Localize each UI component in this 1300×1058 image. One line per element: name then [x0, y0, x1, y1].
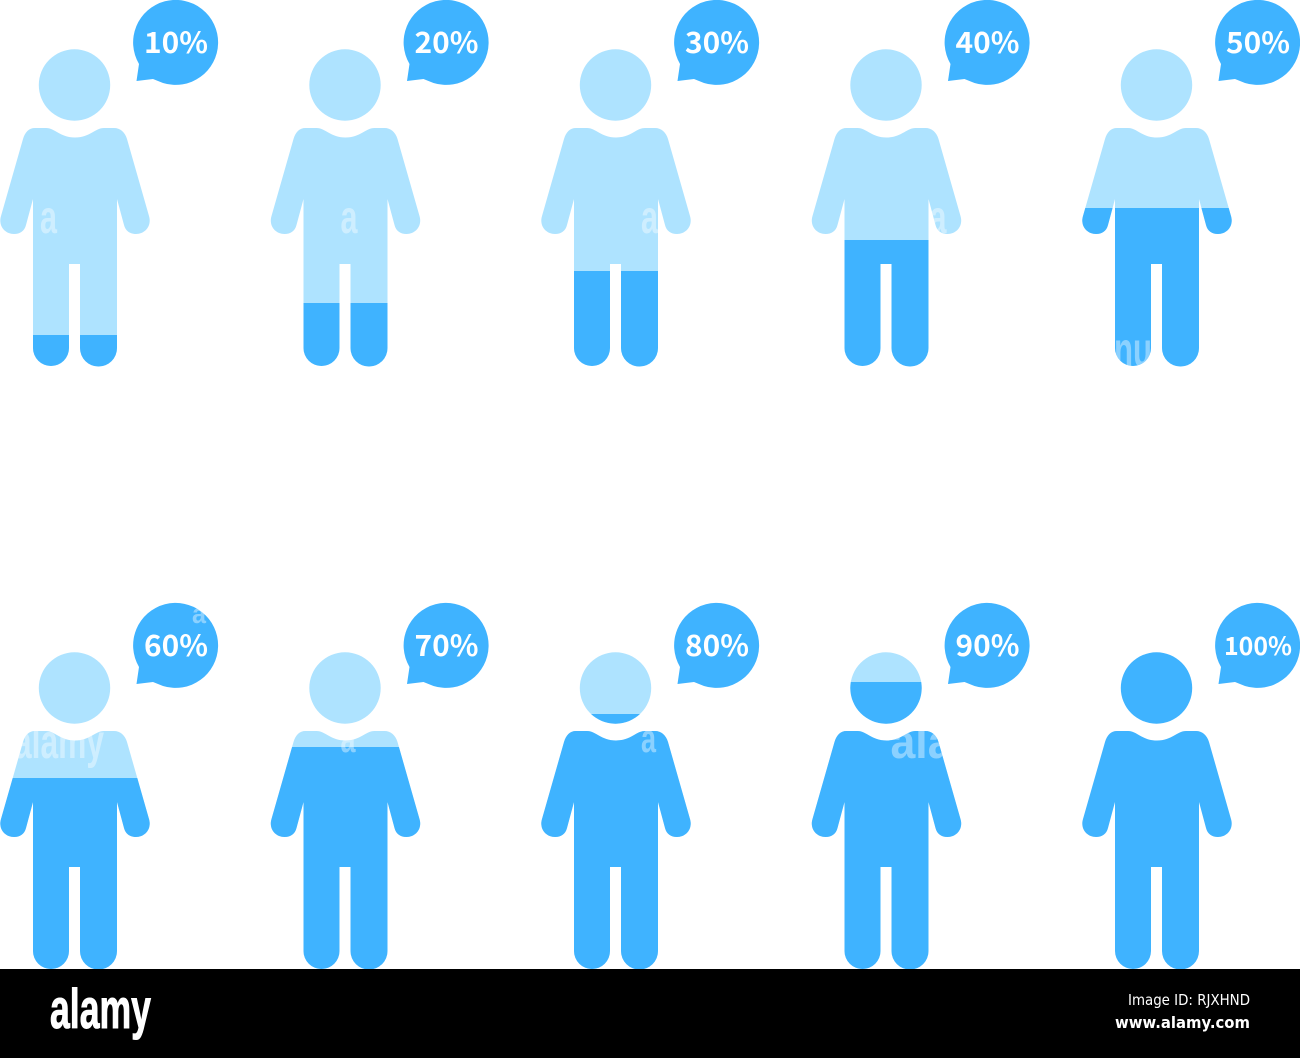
footer bar — [0, 969, 1300, 1058]
figure: 60%: alamy — [14, 716, 104, 769]
figure: 70% — [271, 603, 489, 970]
figure: 20%: a — [340, 191, 358, 243]
footer logo: alamy — [50, 977, 151, 1040]
figure: 40% — [812, 0, 1030, 367]
figure: 50%: 50% — [1226, 20, 1290, 62]
figure: 100%: 100% — [1224, 627, 1292, 663]
figure: 30%: 30% — [685, 20, 749, 62]
figure: 80%: a — [641, 717, 657, 761]
figure: 10% — [0, 0, 218, 367]
figure: 60%: 60% — [144, 623, 208, 665]
figure: 40%: a — [930, 191, 947, 243]
figure: 10%: 10% — [144, 20, 208, 62]
image id: Image ID: RJXHND — [1128, 991, 1250, 1009]
figure: 90% — [812, 603, 1030, 970]
figure: 70%: 70% — [414, 623, 478, 665]
figure: 50% — [1082, 0, 1300, 377]
figure: 60%: a — [192, 598, 206, 629]
figure: 50%: nu — [1114, 324, 1152, 377]
website: www.alamy.com — [1115, 1013, 1250, 1032]
figure: 60% — [0, 598, 218, 970]
figure: 90%: 90% — [956, 623, 1020, 665]
figure: 30% — [541, 0, 759, 367]
figure: 20%: 20% — [414, 20, 478, 62]
figure: 10%: a — [40, 191, 57, 243]
figure: 30%: a — [641, 191, 658, 243]
figure: 90%: ala — [890, 716, 953, 769]
figure: 80% — [541, 603, 759, 970]
figure: 100% — [1082, 603, 1300, 970]
figure: 40%: 40% — [956, 20, 1020, 62]
figure: 70%: a — [340, 717, 356, 761]
figure: 80%: 80% — [685, 623, 749, 665]
figure: 20% — [271, 0, 489, 367]
